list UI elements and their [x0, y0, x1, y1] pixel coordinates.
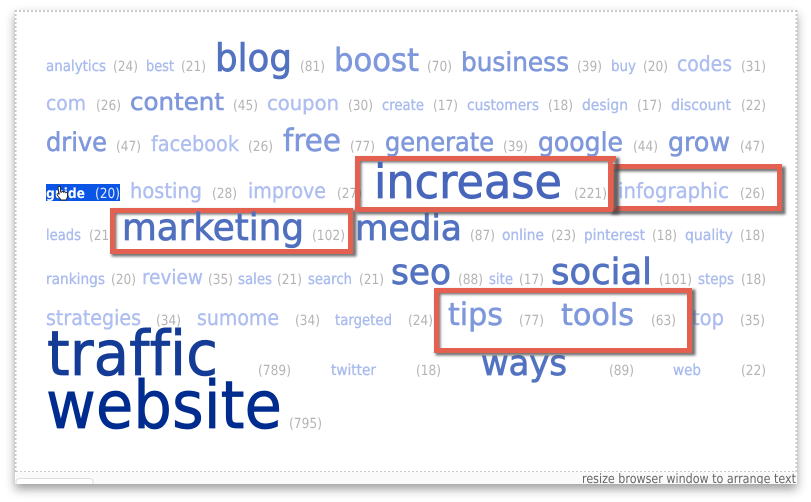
word row 6: (18)	[741, 272, 766, 288]
word row 7: (24)	[408, 313, 433, 329]
word row 4: (27)	[337, 186, 362, 202]
highlight box: marketing	[112, 206, 354, 254]
word row 7: (35)	[740, 313, 765, 329]
word row 7: sumome	[197, 306, 279, 330]
word row 1: best	[146, 57, 174, 75]
word row 3: (77)	[350, 139, 375, 155]
word row 3: facebook	[151, 132, 240, 156]
word row 7	[46, 297, 765, 333]
selected word: guide	[46, 184, 120, 202]
word row 4	[46, 179, 765, 203]
word row 7: targeted	[335, 311, 392, 329]
word row 7: (34)	[156, 313, 181, 329]
word row 5: (18)	[740, 228, 765, 244]
word row 3: grow	[668, 128, 730, 158]
word row 8: (789)	[258, 363, 291, 379]
word row 5: quality	[685, 226, 733, 244]
word row 6: rankings	[46, 270, 105, 288]
word row 4: (28)	[212, 186, 237, 202]
word row 2: design	[582, 96, 628, 114]
word row 2: discount	[671, 96, 731, 114]
word row 2: (17)	[433, 98, 458, 114]
word row 6: steps	[698, 270, 734, 288]
word row 2: (30)	[348, 98, 373, 114]
word row 3: (26)	[248, 139, 273, 155]
word row 2: (45)	[233, 98, 258, 114]
word row 2: com	[46, 91, 86, 115]
word row 4: (26)	[740, 186, 765, 202]
word row 1: buy	[611, 57, 636, 75]
word row 3: drive	[46, 128, 107, 158]
word row 6: review	[142, 265, 203, 289]
word row 7: tips	[448, 297, 503, 333]
word row 1: boost	[334, 41, 419, 79]
word row 6: (17)	[519, 272, 544, 288]
word row 6: social	[551, 252, 652, 293]
word row 6: search	[308, 270, 352, 288]
word row 7: top	[692, 306, 724, 330]
icon: hand cursor	[57, 186, 68, 200]
word row 1: (70)	[427, 59, 452, 75]
word row 8	[47, 317, 766, 390]
word row 2	[46, 88, 766, 116]
word row 2: (17)	[637, 98, 662, 114]
word row 1: (21)	[181, 59, 206, 75]
word row 8: twitter	[331, 361, 377, 379]
word row 6	[46, 252, 766, 293]
word row 8: (22)	[741, 363, 766, 379]
word row 3	[46, 123, 765, 159]
selected word: guide: guide	[46, 186, 85, 202]
word row 3: (39)	[503, 139, 528, 155]
word row 6: (88)	[458, 272, 483, 288]
word row 3: (44)	[633, 139, 658, 155]
word row 3: (47)	[116, 139, 141, 155]
word row 6: (21)	[359, 272, 384, 288]
word row 7: (34)	[295, 313, 320, 329]
word row 7: tools	[561, 298, 634, 333]
word row 6: sales	[238, 270, 272, 288]
word row 8: (89)	[609, 363, 634, 379]
word row 7: strategies	[46, 306, 141, 330]
word row 3: free	[283, 123, 341, 159]
highlight box: marketing: marketing	[122, 206, 304, 249]
word row 6: site	[489, 270, 513, 288]
word row 1: (39)	[577, 59, 602, 75]
word row 6: (101)	[659, 272, 692, 288]
word row 4: hosting	[130, 179, 202, 203]
word row 2: create	[382, 96, 424, 114]
word row 6: (21)	[277, 272, 302, 288]
word row 2: (22)	[741, 98, 766, 114]
word row 5	[46, 209, 765, 249]
word row 1: codes	[677, 52, 732, 76]
word row 4: improve	[248, 179, 326, 203]
word row 8: (18)	[416, 363, 441, 379]
word row 2: (26)	[96, 98, 121, 114]
word row 6: (35)	[208, 272, 233, 288]
word row 1: (31)	[741, 59, 766, 75]
word row 1: business	[461, 48, 569, 78]
word row 5: online	[502, 226, 544, 244]
word row 4: infographic	[618, 179, 729, 203]
word row 1: (20)	[643, 59, 668, 75]
selected word: guide: (20)	[95, 186, 120, 202]
highlight box: marketing: (102)	[312, 228, 345, 244]
word row 1: (81)	[300, 59, 325, 75]
word row 5: (87)	[470, 228, 495, 244]
word row 5: leads	[46, 226, 81, 244]
word row 9: website	[46, 367, 282, 444]
word row 8: ways	[481, 344, 567, 384]
word row 6: seo	[391, 253, 451, 293]
word row 3: google	[538, 128, 623, 158]
highlight box: increase: increase	[374, 155, 562, 210]
word row 2: (18)	[548, 98, 573, 114]
highlight box: increase: (221)	[574, 186, 607, 202]
word row 3: generate	[385, 128, 494, 158]
word row 5: media	[355, 209, 462, 249]
word row 2: content	[130, 88, 224, 116]
word row 1: blog	[215, 36, 292, 80]
word row 5: (18)	[652, 228, 677, 244]
word row 1: (24)	[113, 59, 138, 75]
word row 5: pinterest	[584, 226, 645, 244]
word row 3: (47)	[740, 139, 765, 155]
word row 8: web	[673, 361, 701, 379]
word row 7: (63)	[651, 313, 676, 329]
highlight box: infographic	[612, 166, 783, 212]
word row 8: traffic	[47, 317, 218, 390]
word row 6: (20)	[111, 272, 136, 288]
word row 5: (21)	[89, 228, 114, 244]
word row 1	[46, 36, 766, 80]
word row 1: analytics	[46, 57, 106, 75]
word row 9: (795)	[289, 416, 322, 432]
word row 7: (77)	[519, 313, 544, 329]
word row 2: coupon	[267, 91, 339, 115]
word row 2: customers	[467, 96, 539, 114]
highlight box: tips and tools	[436, 290, 693, 353]
word row 5: (23)	[551, 228, 576, 244]
